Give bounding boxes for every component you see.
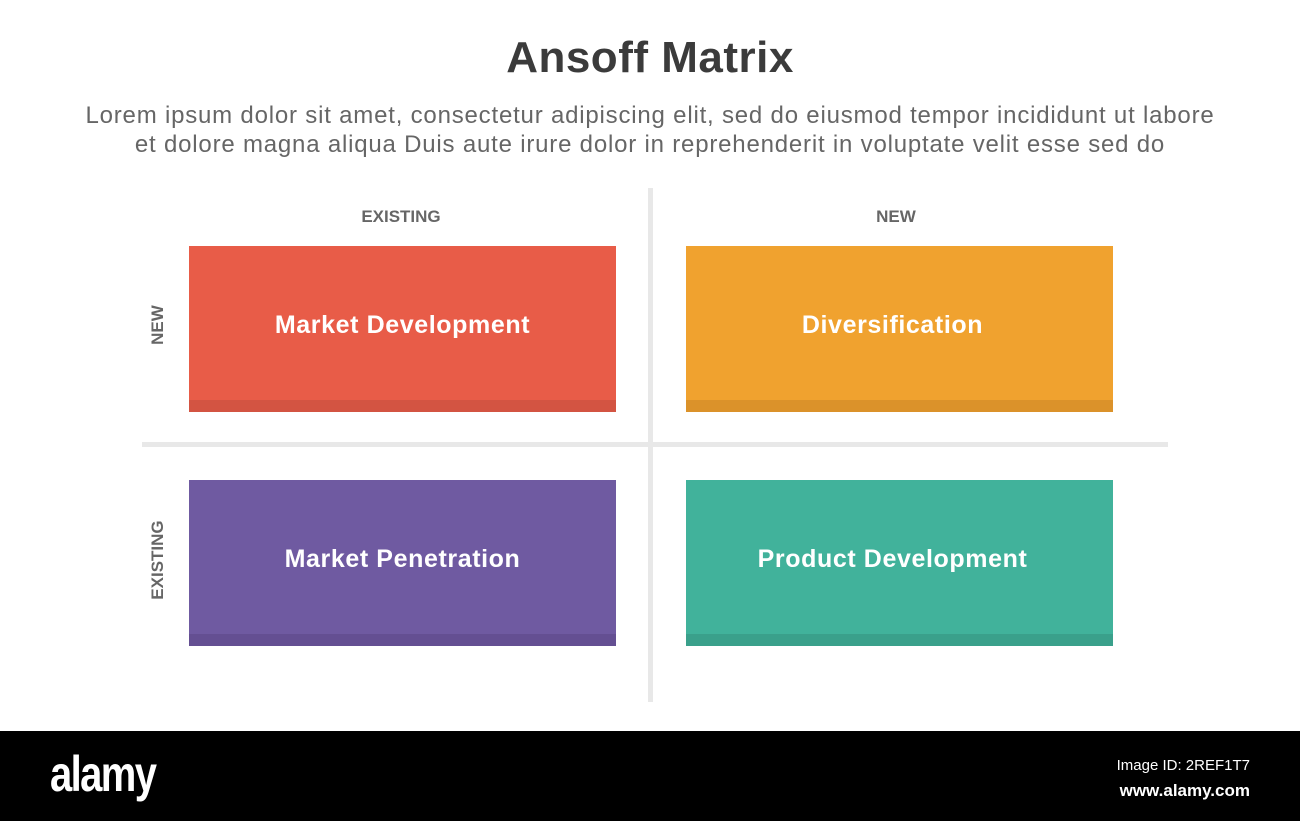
footer band: [0, 731, 1300, 821]
box: market penetration: [189, 480, 616, 646]
row label existing: EXISTING: [148, 520, 167, 600]
footer id: www.alamy.com: [1120, 781, 1250, 800]
footer id: [1117, 757, 1250, 800]
box: product development: Product Development: [758, 544, 1027, 572]
subtitle: [85, 102, 1215, 158]
column label new: NEW: [876, 207, 916, 226]
subtitle: Lorem ipsum dolor sit amet, consectetur adipiscing elit, sed do eiusmod tempor incididunt ut labore: [85, 102, 1215, 129]
box: diversification: Diversification: [802, 310, 983, 338]
box: product development: [686, 480, 1113, 646]
row label new: NEW: [148, 305, 167, 345]
box: market penetration: Market Penetration: [285, 544, 520, 572]
title: Ansoff Matrix: [506, 33, 794, 82]
footer id: Image ID: 2REF1T7: [1117, 757, 1250, 774]
subtitle: et dolore magna aliqua Duis aute irure dolor in reprehenderit in voluptate velit esse sed do: [135, 131, 1165, 158]
box: market development: [189, 246, 616, 412]
column label existing: EXISTING: [361, 207, 441, 226]
box: diversification: [686, 246, 1113, 412]
footer logo: alamy: [50, 746, 155, 802]
box: market development: Market Development: [275, 310, 530, 338]
